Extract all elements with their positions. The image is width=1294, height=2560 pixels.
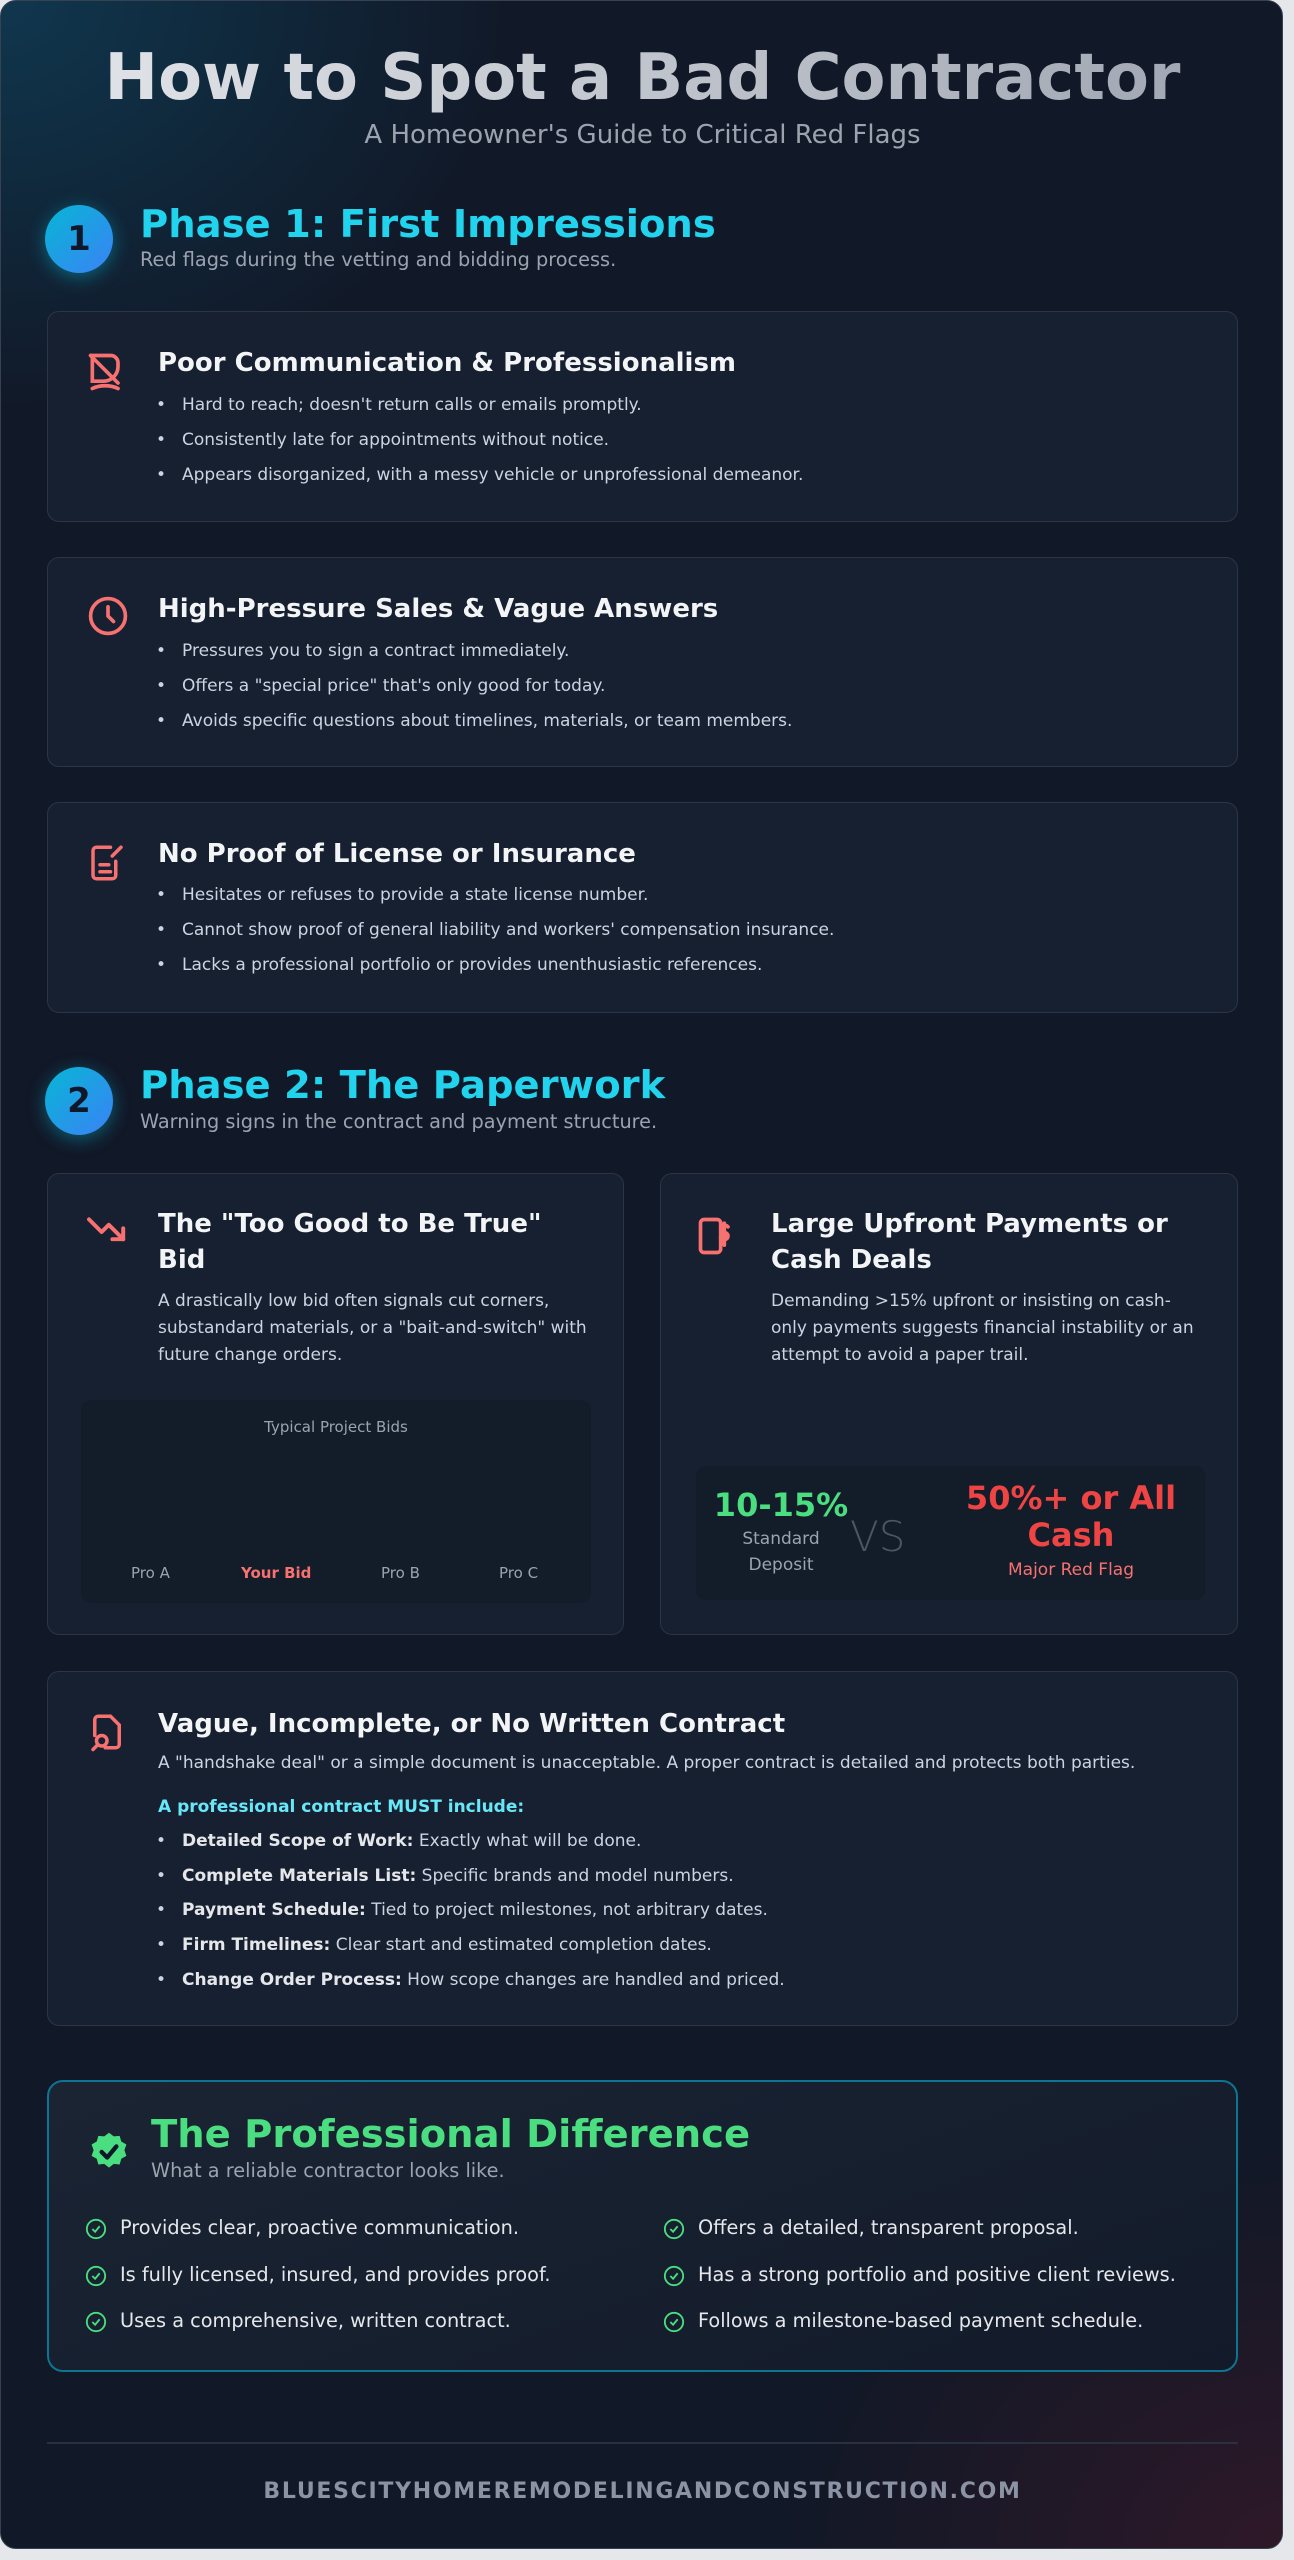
heading: High-Pressure Sales & Vague Answers [158, 594, 718, 624]
panel: poor communication: Hard to reach; doesn't return calls or emails promptly. [182, 395, 642, 415]
panel: high-pressure sales: Avoids specific questions about timelines, materials, or team members. [182, 711, 792, 731]
bar chart: typical project bids: Your Bid [241, 1564, 311, 1582]
panel: no license [47, 802, 1238, 1013]
comparison: deposit vs cash: VS [850, 1512, 905, 1561]
icon: phase number 1: 1 [67, 219, 91, 259]
heading: Poor Communication & Professionalism [158, 348, 736, 378]
phase 2 subheading: Warning signs in the contract and payment structure. [140, 1110, 657, 1133]
panel: high-pressure sales: Pressures you to sign a contract immediately. [182, 641, 569, 661]
bullet list [158, 641, 792, 731]
subheading: What a reliable contractor looks like. [151, 2159, 505, 2182]
panel: vague contract [47, 1671, 1238, 2026]
comparison: deposit vs cash: Standard [742, 1529, 820, 1549]
icon: cash [698, 1218, 730, 1254]
icon: document edit [91, 845, 123, 880]
bullet list [158, 885, 834, 975]
icon: no phone [88, 354, 120, 390]
footer: BLUESCITYHOMEREMODELINGANDCONSTRUCTION.COM [263, 2479, 1022, 2504]
bar chart: typical project bids: Pro B [381, 1564, 420, 1582]
checklist: Offers a detailed, transparent proposal. [698, 2216, 1079, 2239]
icon: verified badge [92, 2132, 126, 2168]
heading: Vague, Incomplete, or No Written Contract [158, 1709, 785, 1739]
icon: phase number 1 [45, 205, 113, 273]
bar chart: typical project bids [81, 1400, 591, 1603]
subtitle: A Homeowner's Guide to Critical Red Flags [364, 120, 921, 150]
phase 1 header [36, 200, 716, 286]
must-include heading: A professional contract MUST include: [158, 1797, 524, 1817]
comparison: deposit vs cash: 10-15% [714, 1486, 848, 1524]
icon: phase number 2 [45, 1067, 113, 1135]
panel: the professional difference [47, 2080, 1238, 2372]
panel: high-pressure sales [47, 557, 1238, 767]
panel: poor communication: Consistently late for appointments without notice. [182, 430, 609, 450]
phase 2 heading: Phase 2: The Paperwork [140, 1063, 665, 1108]
icon: phase number 2: 2 [67, 1081, 91, 1121]
description: A drastically low bid often signals cut corners, substandard materials, or a "bait-and-switch" with future change orders. [158, 1291, 587, 1365]
panel: poor communication: Appears disorganized, with a messy vehicle or unprofessional demeanor. [182, 465, 803, 485]
bar chart: typical project bids: Pro C [499, 1564, 538, 1582]
checklist [86, 2216, 1176, 2332]
description: Demanding >15% upfront or insisting on cash-only payments suggests financial instability or an attempt to avoid a paper trail. [771, 1291, 1194, 1365]
heading: The "Too Good to Be True" Bid [158, 1209, 542, 1275]
panel: vague contract: Complete Materials List: Specific brands and model numbers. [182, 1866, 734, 1886]
heading: Large Upfront Payments or Cash Deals [771, 1209, 1168, 1275]
phase 2 header [36, 1062, 666, 1148]
checklist: Has a strong portfolio and positive client reviews. [698, 2263, 1176, 2286]
comparison: deposit vs cash: 50%+ or All Cash [966, 1479, 1176, 1554]
checklist: Provides clear, proactive communication. [120, 2216, 519, 2239]
comparison: deposit vs cash [696, 1466, 1205, 1600]
panel: no license: Lacks a professional portfolio or provides unenthusiastic references. [182, 955, 762, 975]
phase 1 subheading: Red flags during the vetting and bidding process. [140, 248, 616, 271]
phase 1 heading: Phase 1: First Impressions [140, 202, 716, 247]
checklist: Follows a milestone-based payment schedule. [698, 2309, 1143, 2332]
panel: vague contract: Payment Schedule: Tied to project milestones, not arbitrary dates. [182, 1900, 768, 1920]
panel: vague contract: Firm Timelines: Clear start and estimated completion dates. [182, 1935, 712, 1955]
bullet list [158, 395, 803, 485]
icon: trending down [86, 1217, 126, 1242]
panel: poor communication [47, 311, 1238, 522]
bar chart: typical project bids: Typical Project Bids [264, 1418, 408, 1436]
title: How to Spot a Bad Contractor [105, 41, 1180, 115]
bar chart: typical project bids: Pro A [131, 1564, 170, 1582]
panel: too good to be true bid [47, 1173, 624, 1635]
heading: The Professional Difference [151, 2112, 750, 2157]
heading: No Proof of License or Insurance [158, 839, 636, 869]
bullet list [158, 1831, 785, 1990]
icon: document search [91, 1714, 121, 1752]
checklist: Is fully licensed, insured, and provides proof. [120, 2263, 550, 2286]
comparison: deposit vs cash: Deposit [748, 1555, 814, 1575]
description: A "handshake deal" or a simple document is unacceptable. A proper contract is detailed and protects both parties. [158, 1753, 1135, 1773]
panel: high-pressure sales: Offers a "special price" that's only good for today. [182, 676, 605, 696]
panel: no license: Cannot show proof of general liability and workers' compensation insurance. [182, 920, 834, 940]
panel: vague contract: Detailed Scope of Work: Exactly what will be done. [182, 1831, 641, 1851]
panel: no license: Hesitates or refuses to provide a state license number. [182, 885, 648, 905]
icon: clock [88, 596, 128, 636]
panel: vague contract: Change Order Process: How scope changes are handled and priced. [182, 1970, 785, 1990]
checklist: Uses a comprehensive, written contract. [120, 2309, 511, 2332]
comparison: deposit vs cash: Major Red Flag [1008, 1560, 1134, 1580]
panel: large upfront payments [660, 1173, 1238, 1635]
